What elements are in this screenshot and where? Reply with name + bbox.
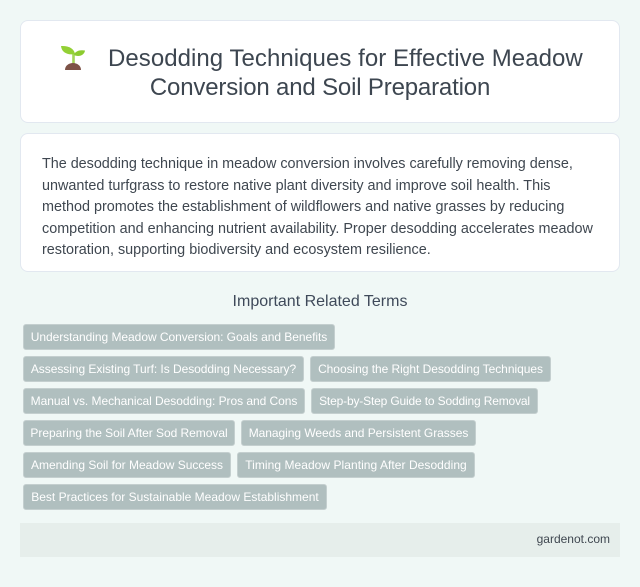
summary text: restoration, supporting biodiversity and ecosystem resilience. <box>42 242 431 258</box>
chip: Manual vs. Mechanical Desodding: Pros and Cons <box>31 394 297 408</box>
summary text: competition and enhancing nutrient availability. Proper desodding accelerates meadow <box>42 221 593 237</box>
chip: Preparing the Soil After Sod Removal <box>30 426 228 440</box>
title: Desodding Techniques for Effective Meadow <box>108 45 583 72</box>
summary text: unwanted turfgrass to restore native plant diversity and improve soil health. This <box>42 178 550 194</box>
summary card <box>20 133 620 272</box>
footer bar <box>20 523 620 557</box>
chip <box>237 452 475 478</box>
chip: Best Practices for Sustainable Meadow Establishment <box>31 490 319 504</box>
chip <box>23 452 231 478</box>
chip <box>23 420 235 446</box>
title: Conversion and Soil Preparation <box>150 74 490 101</box>
summary text <box>42 156 593 258</box>
section heading: Important Related Terms <box>233 293 407 310</box>
chip <box>241 420 476 446</box>
chip: Understanding Meadow Conversion: Goals and Benefits <box>31 330 327 344</box>
chip: Choosing the Right Desodding Techniques <box>318 362 543 376</box>
chip <box>23 356 304 382</box>
chip <box>311 388 538 414</box>
chip <box>23 324 335 350</box>
chip <box>23 484 327 510</box>
chip: Assessing Existing Turf: Is Desodding Necessary? <box>31 362 296 376</box>
summary text: The desodding technique in meadow conversion involves carefully removing dense, <box>42 156 573 172</box>
chip: Amending Soil for Meadow Success <box>31 458 223 472</box>
title <box>108 45 583 101</box>
chip <box>310 356 551 382</box>
footer source: gardenot.com <box>537 532 610 546</box>
chip: Step-by-Step Guide to Sodding Removal <box>319 394 530 408</box>
chip <box>23 388 305 414</box>
chip: Timing Meadow Planting After Desodding <box>245 458 467 472</box>
icon: seedling <box>61 46 85 70</box>
header card <box>20 20 620 123</box>
term chips <box>23 324 551 510</box>
summary text: method promotes the establishment of wildflowers and native grasses by reducing <box>42 199 564 215</box>
chip: Managing Weeds and Persistent Grasses <box>249 426 468 440</box>
